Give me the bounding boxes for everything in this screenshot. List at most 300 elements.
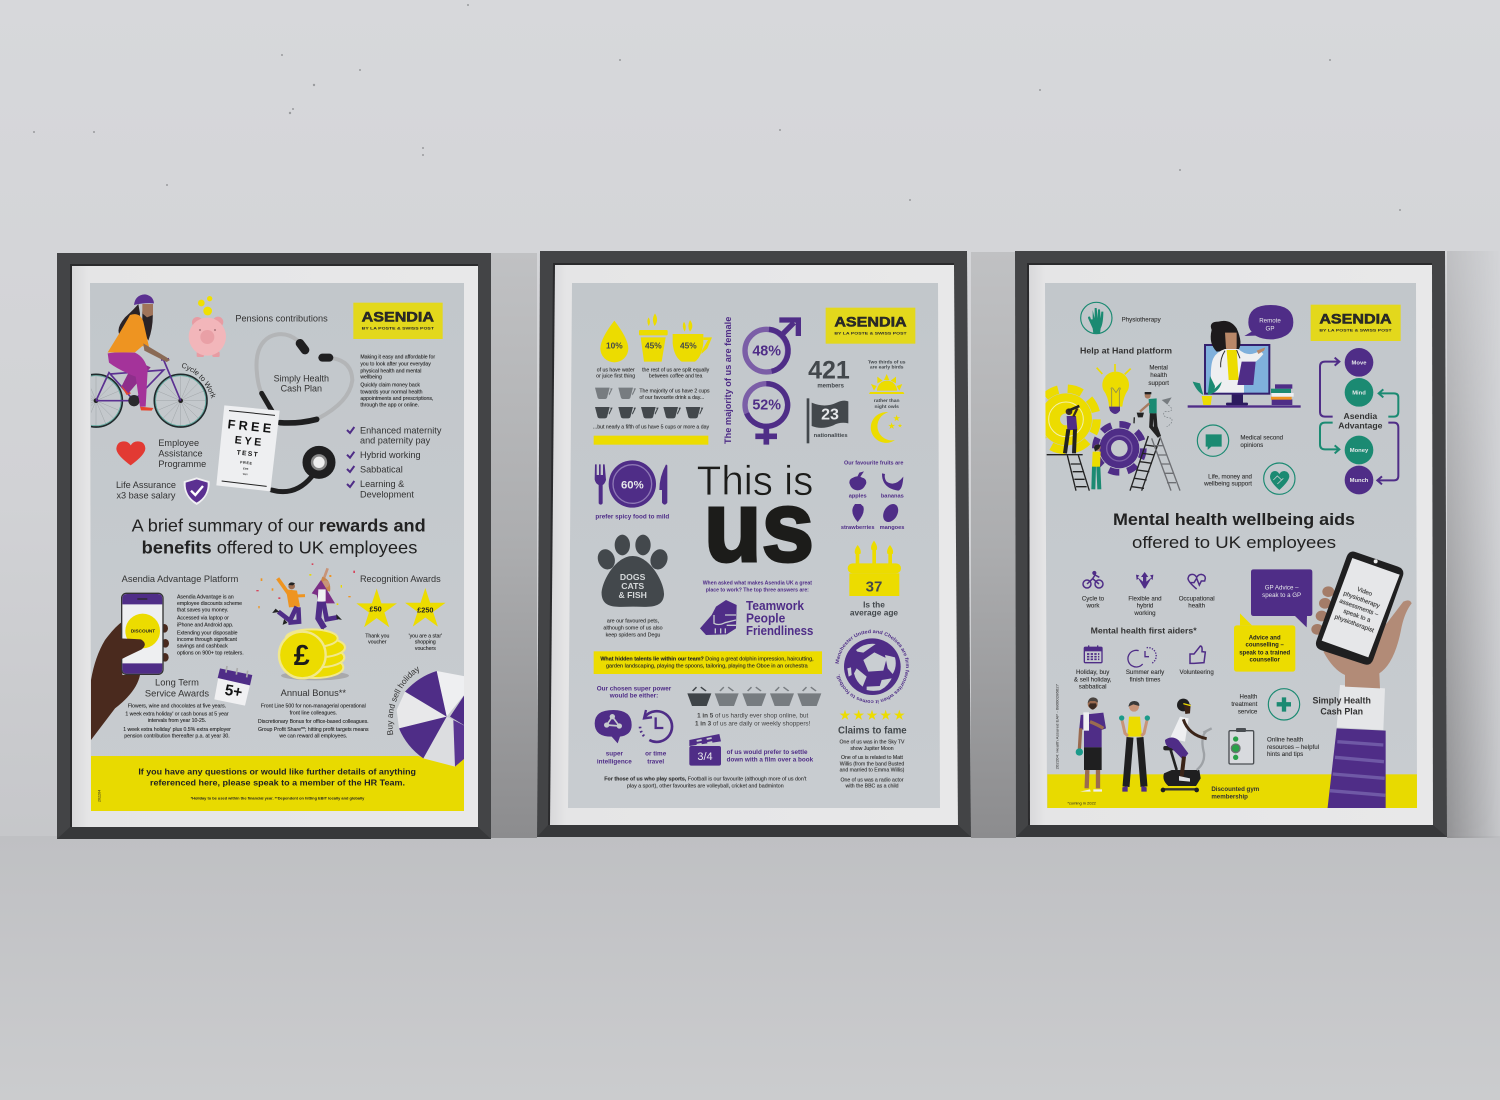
speech bubble: advice and counselling xyxy=(1234,613,1295,672)
text: service awards detail: pension contribution thereafter p.a. at year 30. xyxy=(124,734,230,740)
shadow right of frame three xyxy=(1447,251,1493,838)
frame: right poster xyxy=(1015,251,1447,837)
text: sports xyxy=(604,777,807,790)
poster: mental health wellbeing xyxy=(1035,302,1419,810)
label: mental health support: health xyxy=(1150,372,1168,379)
icon: paw print: & FISH xyxy=(618,590,647,600)
label: medical second opinions xyxy=(1240,434,1284,449)
icon: water drop 10 percent xyxy=(600,321,628,362)
illustration: hand holding phone xyxy=(91,593,169,740)
text: icon captions row one: hybrid xyxy=(1137,603,1154,610)
text: online health resources: hints and tips xyxy=(1267,751,1303,758)
text: annual bonus detail: Front Line 500 for non-managerial operational xyxy=(261,704,366,710)
label: Asendia Advantage: Advantage xyxy=(1338,421,1383,431)
text: sports: For those of us who play sports, Football is our favourite (although more of us don't xyxy=(604,777,807,783)
arrow: purple to munch xyxy=(1377,423,1398,484)
text: pets caption: keep spiders and Degu xyxy=(606,632,660,638)
text: cash plan description xyxy=(360,355,435,409)
text: what makes Asendia great: place to work? The top three answers are: xyxy=(706,588,809,594)
text: cash plan description: through the app or online. xyxy=(360,403,419,409)
icon: calendar five plus xyxy=(214,666,252,706)
text: annual bonus detail: Discretionary Bonus for office-based colleagues. xyxy=(258,719,369,725)
speech bubble: remote GP: Remote xyxy=(1259,318,1281,325)
text: drink captions: or juice first thing xyxy=(596,374,635,380)
icon: calendar five plus: 5+ xyxy=(223,682,244,701)
arrow: purple to move xyxy=(1320,358,1339,417)
heading: mental health wellbeing aids: Mental health wellbeing aids xyxy=(1113,510,1355,529)
yellow callout: hidden talents: What hidden talents lie within our team? Doing a great dolphin impression, haircutting, xyxy=(600,657,814,663)
label: medical second opinions: Medical second xyxy=(1240,434,1284,441)
label: health treatment service: Health xyxy=(1240,694,1258,701)
text: cash plan description: Making it easy and affordable for xyxy=(360,355,435,361)
checklist of benefits: Development xyxy=(360,489,414,499)
illustration: hand holding phone: Video xyxy=(1356,586,1374,598)
label: medical second opinions: opinions xyxy=(1240,442,1263,449)
logo: Asendia: BY LA POSTE & SWISS POST xyxy=(1319,328,1392,333)
text: discounted gym membership: membership xyxy=(1211,794,1248,801)
text: online health resources: resources – helpful xyxy=(1267,744,1319,751)
text: cash plan description: Quickly claim money back xyxy=(360,383,420,389)
pictogram: five cups xyxy=(595,407,703,418)
text: advantage description: options on 900+ top retailers. xyxy=(177,650,244,656)
text: top three answers: Friendliness xyxy=(746,624,813,638)
text: pets caption: although some of us also xyxy=(603,625,663,631)
text: footer message: *Holiday to be used within the financial year. **Dependent on hitting EBIT locally and globally xyxy=(191,796,365,800)
text: night owls: rather than xyxy=(874,398,900,404)
checklist of benefits: Enhanced maternity xyxy=(360,425,442,435)
text: claims detail: with the BBC as a child xyxy=(845,784,899,790)
heading: mental health wellbeing aids xyxy=(1113,510,1355,552)
icon: handshake xyxy=(700,600,737,635)
text: night owls xyxy=(874,398,900,410)
text: recognition captions: vouchers xyxy=(415,646,436,652)
text: advantage description: income through significant xyxy=(177,637,237,643)
eye test card: EYE xyxy=(234,434,265,449)
text: what makes Asendia great: When asked what makes Asendia UK a great xyxy=(703,581,812,587)
eye test card xyxy=(216,405,280,491)
text: discounted gym membership xyxy=(1211,786,1260,801)
checklist of benefits xyxy=(347,425,442,499)
text: cash plan description: physical health and mental xyxy=(360,368,421,374)
text: what makes Asendia great xyxy=(703,581,812,594)
speech bubble: remote GP: GP xyxy=(1266,325,1274,332)
text: icon captions row two: Holiday, buy xyxy=(1076,669,1110,676)
advantage cycle: Mind xyxy=(1352,390,1366,396)
footnote: *coming in 2022 xyxy=(1067,800,1097,805)
speech bubble: remote GP xyxy=(1244,305,1293,339)
text: icon captions row two: & sell holiday, xyxy=(1074,677,1112,684)
illustration: woman with dumbbells xyxy=(1119,701,1150,792)
lower section of rewards poster xyxy=(91,563,464,811)
pictogram: two cups xyxy=(595,388,636,399)
label: mental health support: support xyxy=(1148,380,1169,387)
illustration: doctor on monitor xyxy=(1188,321,1301,408)
speech bubble: advice and counselling: Advice and xyxy=(1249,635,1281,641)
icon: crescent moon xyxy=(871,412,902,443)
text: cash plan description: towards your normal health xyxy=(360,390,423,396)
logo: Asendia xyxy=(826,308,915,344)
advantage cycle: Move xyxy=(1352,360,1367,366)
illustration: gold coins xyxy=(279,629,349,680)
text: drink captions: the rest of us are split equally xyxy=(642,368,710,374)
text: advantage description: iPhone and Android app. xyxy=(177,622,233,628)
illustration: gears ladders and people xyxy=(1035,364,1180,491)
text: service awards detail: intervals from year 10-25. xyxy=(148,718,206,724)
labels: super intelligence or time travel xyxy=(597,751,667,765)
stat: 421 members: 421 xyxy=(808,356,850,384)
icon: health plus xyxy=(1268,689,1300,720)
text: advantage description: Accessed via laptop or xyxy=(177,616,229,622)
illustration: hand holding phone: DISCOUNT xyxy=(131,629,155,634)
arrow: teal to mind xyxy=(1379,389,1398,417)
shadow gap between frames two and three xyxy=(971,252,1016,838)
illustration: man with towel xyxy=(1076,697,1106,792)
text: icon captions row two: finish times xyxy=(1130,677,1160,684)
text: annual bonus detail: we can reward all employees. xyxy=(279,734,347,740)
speech bubble: GP advice: speak to a GP xyxy=(1262,592,1301,599)
text: icon captions row one xyxy=(1082,595,1215,617)
logo: Asendia: ASENDIA xyxy=(834,314,907,330)
heading: mental health wellbeing aids: offered to UK employees xyxy=(1132,533,1336,552)
text: recognition captions: voucher xyxy=(368,640,387,646)
icon: clock time travel xyxy=(640,710,672,742)
icon: summer early finish clock xyxy=(1128,648,1156,667)
icon: brain xyxy=(595,710,632,743)
upper section of rewards poster xyxy=(91,294,443,557)
label: health treatment service xyxy=(1231,694,1258,715)
text: night owls: night owls xyxy=(874,404,899,410)
text: icon captions row one: Occupational xyxy=(1179,595,1215,602)
icon: red heart xyxy=(116,441,145,465)
text: claims detail: One of us was a radio actor xyxy=(840,777,904,783)
icon: birthday cake 37: 37 xyxy=(866,579,882,596)
text: average age: average age xyxy=(850,607,898,617)
label: employee assistance programme: Employee xyxy=(158,438,199,448)
text: two cups caption: The majority of us have 2 cups xyxy=(639,389,710,395)
heading: long term service awards: Long Term xyxy=(155,678,199,688)
curved label: buy and sell holiday: Buy and sell holiday xyxy=(387,666,419,735)
icon: paw print: CATS xyxy=(621,581,644,591)
background: concrete wall xyxy=(0,0,1500,836)
speech bubble: advice and counselling: counselling – xyxy=(1246,643,1284,649)
text: sports: play a sport), other favourites are volleyball, cricket and badminton xyxy=(627,784,784,790)
label: mangoes: mangoes xyxy=(880,525,904,531)
heading: fruits: Our favourite fruits are xyxy=(844,460,903,466)
speech bubble: advice and counselling: speak to a trained xyxy=(1239,650,1290,656)
text: icon captions row one: work xyxy=(1085,602,1100,609)
yellow footer band xyxy=(91,756,468,813)
text: icon captions row one: working xyxy=(1133,610,1156,617)
text: icon captions row two: Summer early xyxy=(1126,669,1165,676)
text: claims detail: One of us was in the Sky TV xyxy=(840,739,905,745)
label: life assurance: x3 base salary xyxy=(116,491,176,501)
label: Asendia Advantage: Asendia xyxy=(1343,411,1377,421)
icon: medical second opinions xyxy=(1197,425,1229,456)
background: floor xyxy=(0,836,1500,1100)
illustration: hand holding phone: physiotherapy xyxy=(1342,590,1382,610)
advantage cycle: Money xyxy=(1350,448,1369,454)
poster: rewards and benefits xyxy=(91,294,464,811)
icon: piggy bank xyxy=(189,296,226,357)
checklist of benefits: Hybrid working xyxy=(360,450,421,460)
text: claims detail xyxy=(840,739,905,790)
advantage cycle: Munch xyxy=(1350,478,1369,484)
labels: super intelligence or time travel: intelligence xyxy=(597,758,632,765)
text: cash plan description: appointments and prescriptions, xyxy=(360,396,433,402)
text: recognition captions xyxy=(365,634,442,650)
shadow gap between frames one and two xyxy=(491,253,537,838)
text: service awards detail xyxy=(123,703,231,740)
label: bananas: bananas xyxy=(881,493,904,499)
caption: spicy food: prefer spicy food to mild xyxy=(595,514,669,521)
icon: tea mug 45 percent: 45% xyxy=(680,341,697,351)
advantage cycle xyxy=(1320,348,1398,494)
text: service awards detail: Flowers, wine and chocolates at five years. xyxy=(128,703,226,709)
text: film over book: of us would prefer to settle xyxy=(727,749,808,756)
icon: plate 60 percent spicy xyxy=(595,460,667,508)
label: strawberries: strawberries xyxy=(841,525,874,531)
text: film over book xyxy=(727,749,814,764)
text: cash plan description: wellbeing xyxy=(360,375,382,381)
text: claims detail: and married to Emma Willis) xyxy=(840,768,905,774)
heading: claims to fame: Claims to fame xyxy=(838,726,907,737)
text: service awards detail: 1 week extra holiday' or cash bonus at 5 year xyxy=(125,712,229,718)
icon: physiotherapy hand xyxy=(1081,302,1112,334)
text: early birds: Two thirds of us xyxy=(868,359,906,365)
chart: male symbol 48 percent: 48% xyxy=(752,344,781,360)
text: pets caption xyxy=(603,619,663,638)
yellow callout: hidden talents xyxy=(594,651,822,674)
text: icon captions row one: Cycle to xyxy=(1082,595,1105,602)
upper section of this is us poster xyxy=(593,308,915,531)
text: early birds xyxy=(868,359,906,371)
illustration: jumping colleagues and confetti xyxy=(256,563,355,634)
label: apples: apples xyxy=(849,493,867,499)
heading: brief summary: benefits offered to UK employees xyxy=(142,537,417,557)
text: claims detail: show Jupiter Moon xyxy=(850,746,894,752)
label: employee assistance programme: Assistance xyxy=(158,449,203,459)
poster: this is us xyxy=(593,308,916,788)
arrow: teal to money xyxy=(1320,423,1339,453)
label: life money and wellbeing support: Life, money and xyxy=(1208,473,1253,480)
text: footer message xyxy=(138,767,416,800)
eye test card: EYE xyxy=(243,466,249,471)
stat: 23 nationalities: nationalities xyxy=(814,433,848,439)
icon: clipboard checklist xyxy=(1229,728,1254,764)
icon: two hundred fifty pound star xyxy=(405,588,446,627)
text: recognition captions: Thank you xyxy=(365,633,390,639)
stat: 421 members: members xyxy=(817,383,845,389)
text: icon captions row one: Flexible and xyxy=(1128,595,1162,602)
yellow floor band xyxy=(1047,774,1419,809)
label: simply health cash plan: Simply Health xyxy=(1312,696,1371,706)
pictogram: shopping baskets xyxy=(687,687,821,706)
logo: Asendia: BY LA POSTE & SWISS POST xyxy=(362,326,435,331)
label: health treatment service: treatment xyxy=(1231,701,1258,708)
speech bubble: GP advice: GP Advice – xyxy=(1265,584,1299,591)
icon: volunteering thumbs up xyxy=(1190,646,1205,663)
label: health treatment service: service xyxy=(1238,708,1258,715)
label: simply health cash plan: Simply Health xyxy=(274,373,329,383)
frame: left poster xyxy=(57,253,491,839)
logo: Asendia: ASENDIA xyxy=(1319,311,1392,327)
icon: tea mug 45 percent xyxy=(673,320,712,362)
text: online health resources xyxy=(1267,736,1319,758)
text: drink captions: of us have water xyxy=(597,368,635,374)
illustration: hand holding phone: speak to a xyxy=(1342,608,1372,624)
illustration: hand holding phone: physiotherapist xyxy=(1334,614,1375,634)
chart: female symbol 52 percent xyxy=(745,384,788,445)
illustration: gold coins: £ xyxy=(294,640,310,672)
labels: super intelligence or time travel: or time xyxy=(645,751,667,758)
text: annual bonus detail: Group Profit Share**; hitting profit targets means xyxy=(258,727,369,733)
icon: paw print: DOGS xyxy=(620,572,646,582)
text: advantage description: Asendia Advantage is an xyxy=(177,594,234,600)
icon: calendar xyxy=(1084,645,1102,663)
heading: long term service awards: Service Awards xyxy=(145,688,209,698)
text: film over book: down with a film over a book xyxy=(727,757,814,764)
text: drink captions: between coffee and tea xyxy=(649,374,703,380)
label: mental health support: Mental xyxy=(1149,364,1168,371)
heading: annual bonus: Annual Bonus** xyxy=(281,688,346,698)
icon: film clapper three quarters xyxy=(689,734,721,766)
text: icon captions row two: sabbatical xyxy=(1079,684,1107,691)
label: life money and wellbeing support xyxy=(1203,473,1253,488)
text: shopping statistic: 1 in 5 of us hardly ever shop online, but xyxy=(697,713,808,720)
logo: Asendia: ASENDIA xyxy=(362,309,434,325)
icon: heart handshake xyxy=(1264,463,1295,494)
yellow callout: hidden talents: garden landscaping, playing the spoons, tailoring, playing the Oboe in an orchestra xyxy=(606,664,808,670)
icon: flexible working arrows xyxy=(1136,572,1153,588)
text: advantage description: employee discounts scheme xyxy=(177,601,242,607)
heading: super power xyxy=(597,686,672,699)
checklist of benefits: Sabbatical xyxy=(360,465,403,475)
logo: Asendia xyxy=(353,303,443,339)
heading: help at hand: Help at Hand platform xyxy=(1080,346,1172,356)
text: average age xyxy=(850,599,898,617)
text: two cups caption: of our favourite drink a day... xyxy=(639,395,704,401)
heading: super power: Our chosen super power xyxy=(597,686,672,693)
text: two cups caption xyxy=(639,389,710,401)
icon: plate 60 percent spicy: 60% xyxy=(621,480,644,492)
eye test card: FREE xyxy=(227,417,275,436)
stat: 23 nationalities: 23 xyxy=(821,406,839,423)
text: service awards detail: 1 week extra holiday' plus 0.5% extra employer xyxy=(123,727,231,733)
icon: strawberry xyxy=(852,504,864,522)
icon: apple xyxy=(849,471,866,490)
label: mental health support xyxy=(1148,364,1169,387)
text: claims detail: Willis (from the band Busted xyxy=(840,761,904,767)
heading: this is: This is xyxy=(697,457,813,504)
upper section of mental health poster xyxy=(1035,302,1401,494)
lower section of mental health poster xyxy=(1047,552,1419,810)
text: average age: Is the xyxy=(863,599,885,609)
heading: advantage platform: Asendia Advantage Platform xyxy=(122,574,239,584)
icon: paw print xyxy=(595,535,670,607)
label: life assurance xyxy=(116,480,176,501)
vertical heading: majority female: The majority of us are female xyxy=(723,317,733,444)
yellow divider bar xyxy=(594,436,708,445)
speech bubble: advice and counselling: counsellor xyxy=(1250,658,1280,664)
heading: super power: would be either: xyxy=(609,692,658,699)
label: simply health cash plan: Cash Plan xyxy=(1320,706,1363,716)
label: physiotherapy: Physiotherapy xyxy=(1122,316,1162,323)
text: footer message: referenced here, please speak to a member of the HR Team. xyxy=(150,777,405,787)
reference code: 202204 xyxy=(98,790,102,802)
stat: 23 nationalities xyxy=(807,398,848,443)
text: recognition captions: 'you are a star' xyxy=(409,633,442,639)
text: advantage description xyxy=(177,594,244,656)
illustration: woman on bicycle xyxy=(91,294,208,428)
text: online health resources: Online health xyxy=(1267,736,1304,743)
text: recognition captions: shopping xyxy=(415,640,436,646)
lower section of this is us poster xyxy=(594,534,910,788)
logo: Asendia: BY LA POSTE & SWISS POST xyxy=(834,331,907,336)
frame: middle poster xyxy=(537,251,971,837)
icon: mango xyxy=(880,501,901,525)
icon: coffee cup 45 percent xyxy=(639,313,668,362)
label: employee assistance programme xyxy=(158,438,206,469)
icon: two hundred fifty pound star: £250 xyxy=(417,605,433,614)
icon: fifty pound star: £50 xyxy=(370,605,382,614)
label: employee assistance programme: Programme xyxy=(158,459,206,469)
heading: brief summary xyxy=(132,516,426,557)
icon: sunrise xyxy=(869,374,904,394)
checklist of benefits: Learning & xyxy=(360,479,404,489)
chart: female symbol 52 percent: 52% xyxy=(752,398,781,414)
eye test card: FREE xyxy=(240,460,253,466)
icon: bananas xyxy=(882,473,903,491)
text: top three answers: People xyxy=(746,612,785,626)
icon: coffee cup 45 percent: 45% xyxy=(645,341,662,351)
text: footer message: If you have any questions or would like further details of anything xyxy=(138,767,416,777)
heading: brief summary: A brief summary of our rewards and xyxy=(132,516,426,536)
text: discounted gym membership: Discounted gym xyxy=(1211,786,1260,793)
label: life money and wellbeing support: wellbeing support xyxy=(1203,481,1252,488)
icon: fifty pound star xyxy=(356,589,397,627)
chart: male symbol 48 percent xyxy=(745,320,798,372)
eye test card: TEST xyxy=(242,474,248,476)
heading: recognition awards: Recognition Awards xyxy=(360,574,441,584)
text: claims detail: One of us is related to Matt xyxy=(841,755,904,761)
text: advantage description: that saves you money. xyxy=(177,608,228,614)
text: advantage description: savings and cashback xyxy=(177,644,228,650)
text: annual bonus detail: front line colleagues. xyxy=(290,710,337,716)
icon: water drop 10 percent: 10% xyxy=(606,341,623,351)
text: icon captions row two: Volunteering xyxy=(1180,669,1214,676)
text: early birds: are early birds xyxy=(870,365,904,371)
illustration: woman on exercise bike xyxy=(1161,699,1212,792)
curved label: cycle to work: Cycle to Work xyxy=(182,363,216,398)
speech bubble: GP advice xyxy=(1251,569,1312,627)
icon: shield xyxy=(184,477,210,505)
labels: super intelligence or time travel: super xyxy=(606,751,623,758)
text: annual bonus detail xyxy=(258,704,369,740)
heading: mental health first aiders: Mental health first aiders* xyxy=(1091,627,1198,636)
icon: film clapper three quarters: 3/4 xyxy=(697,751,713,763)
eye test card: TEST xyxy=(236,450,259,459)
logo: Asendia xyxy=(1311,305,1401,341)
icon: football with curved caption: Manchester United and Chelsea are firm favourites when it comes to football. xyxy=(835,629,910,704)
icon: birthday cake 37 xyxy=(848,541,901,596)
checklist of benefits: and paternity pay xyxy=(360,436,431,446)
text: top three answers: Teamwork xyxy=(746,599,805,613)
text: cash plan description: you to look after your everyday xyxy=(360,362,431,368)
heading: us: us xyxy=(704,471,814,583)
reference code: 202204: Health Assured EAP - 08000286027 xyxy=(1055,684,1059,769)
text: top three answers xyxy=(746,599,813,638)
label: simply health cash plan: Cash Plan xyxy=(281,383,322,393)
